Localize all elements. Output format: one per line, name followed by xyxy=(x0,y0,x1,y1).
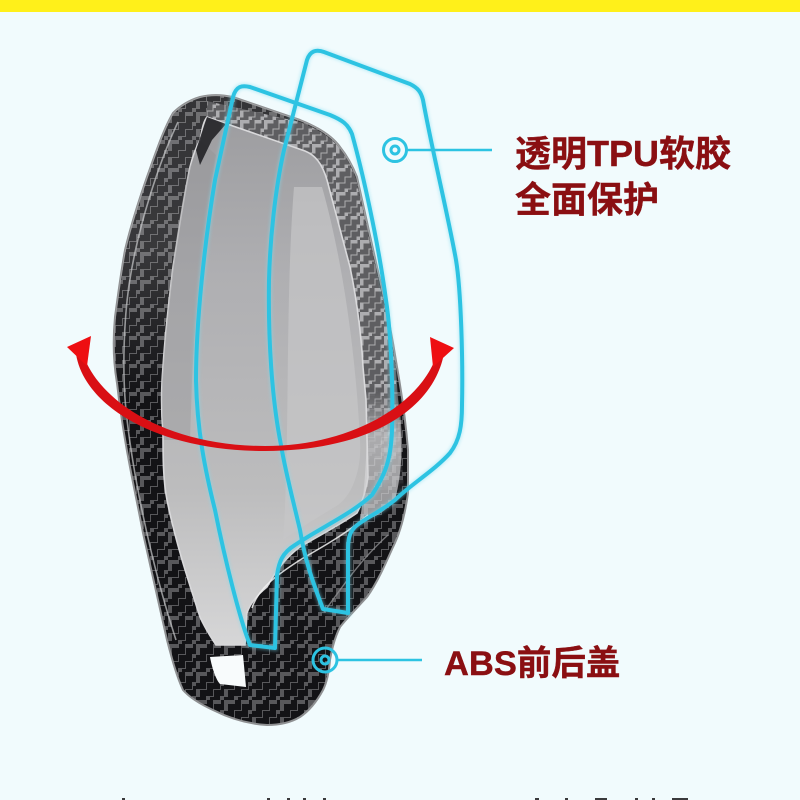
label: TPU cover: 全面保护 xyxy=(515,179,659,220)
red rotation arrow xyxy=(67,336,454,451)
right arrowhead xyxy=(430,337,454,367)
transparent TPU outline: front sheet xyxy=(196,86,392,648)
outer carbon shell xyxy=(114,95,408,725)
callout marker: ABS xyxy=(313,648,422,672)
glow under TPU outlines xyxy=(196,51,462,648)
silver line on left edge xyxy=(124,122,178,640)
light carbon band on right side xyxy=(207,101,404,490)
cavity top corner shadow xyxy=(196,117,226,165)
callout marker: TPU xyxy=(384,138,492,162)
transparent TPU outline: rear sheet xyxy=(269,51,462,613)
cavity inner panel shading xyxy=(283,187,360,540)
white button slot xyxy=(210,655,246,687)
top yellow bar xyxy=(0,0,800,12)
translucent right streak area xyxy=(360,390,402,520)
arc xyxy=(76,354,443,451)
key fob shell: ABS cover xyxy=(114,95,408,725)
label: ABS cover: ABS前后盖 xyxy=(444,645,620,683)
inner cavity xyxy=(162,117,368,645)
lighter upper shell overlay xyxy=(114,95,402,400)
product diagram xyxy=(67,46,492,726)
label: TPU cover xyxy=(515,133,731,220)
white rim highlights xyxy=(252,515,368,608)
cavity left darker strip xyxy=(162,140,216,440)
label: TPU cover: 透明TPU软胶 xyxy=(515,133,731,174)
left arrowhead xyxy=(67,336,91,366)
